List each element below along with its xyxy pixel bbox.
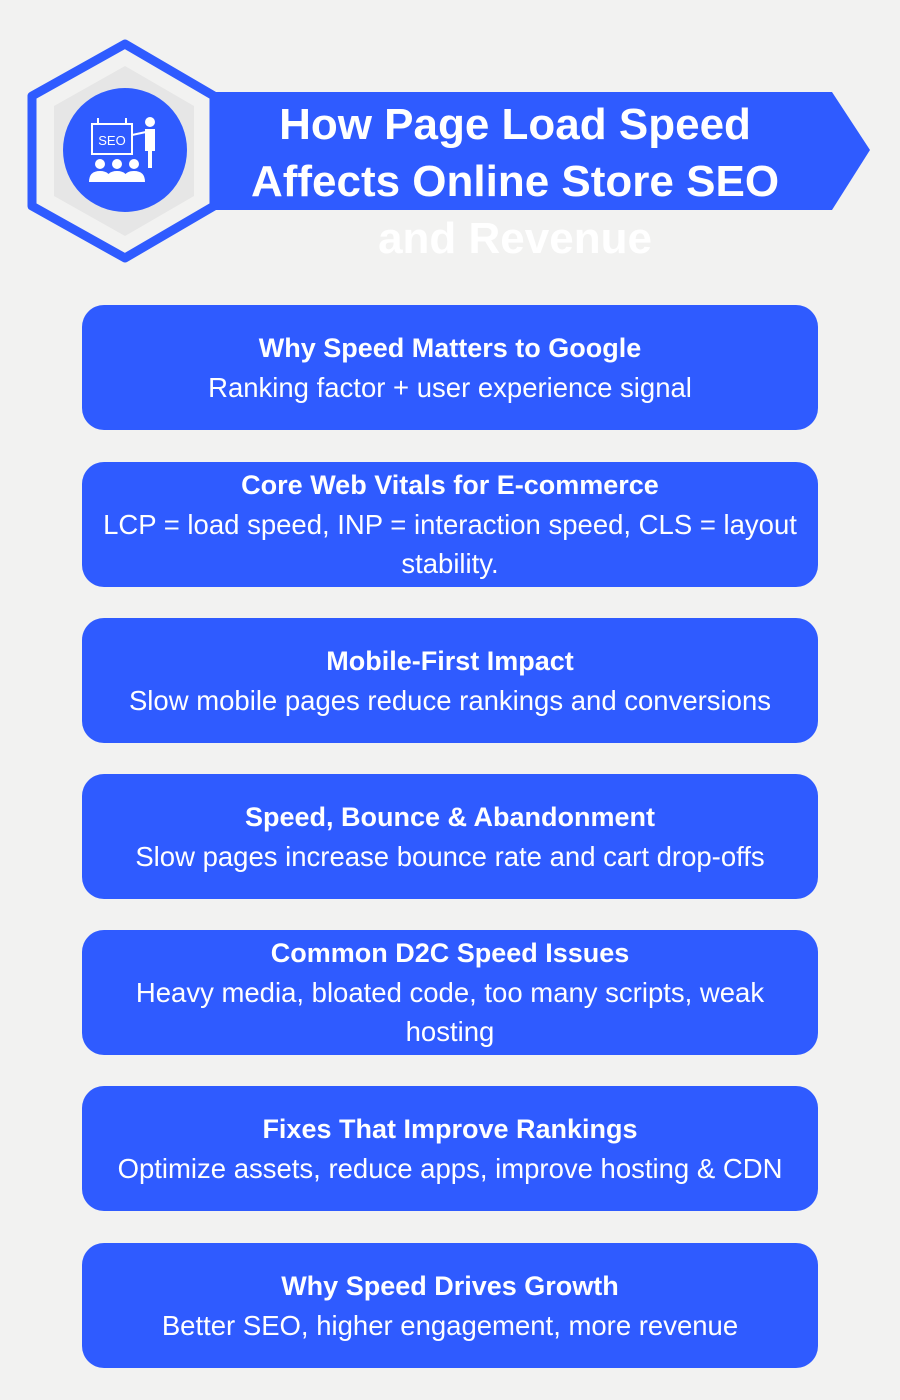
card: D2C issues: Heavy media, bloated code, too many scripts, weak	[136, 977, 764, 1008]
card: D2C issues	[82, 930, 818, 1055]
card: core web vitals: LCP = load speed, INP = interaction speed, CLS = layout	[103, 509, 797, 540]
card: fixes: Fixes That Improve Rankings	[262, 1114, 638, 1144]
title: and Revenue	[378, 214, 652, 263]
card: bounce: Slow pages increase bounce rate and cart drop-offs	[135, 840, 765, 872]
card: mobile-first: Mobile-First Impact	[326, 646, 574, 676]
card: mobile-first	[82, 618, 818, 743]
card: why speed matters	[82, 305, 818, 430]
card: why speed matters: Ranking factor + user experience signal	[208, 372, 692, 402]
card: growth	[82, 1243, 818, 1368]
card: growth: Why Speed Drives Growth	[281, 1270, 619, 1300]
card: core web vitals: stability.	[401, 548, 499, 579]
card: core web vitals: Core Web Vitals for E-commerce	[241, 470, 659, 500]
title: How Page Load Speed	[279, 100, 751, 149]
card: growth: Better SEO, higher engagement, more revenue	[162, 1310, 738, 1340]
banner ribbon	[200, 92, 870, 210]
title	[251, 100, 779, 263]
card: bounce: Speed, Bounce & Abandonment	[245, 802, 655, 832]
icon: hexagon badge: SEO	[98, 133, 126, 148]
header banner	[28, 40, 870, 263]
card: why speed matters: Why Speed Matters to Google	[259, 332, 641, 362]
title: Affects Online Store SEO	[251, 157, 779, 206]
icon: hexagon badge	[32, 44, 214, 258]
card: mobile-first: Slow mobile pages reduce rankings and conversions	[129, 684, 771, 716]
card: D2C issues: hosting	[406, 1016, 494, 1047]
card: D2C issues: Common D2C Speed Issues	[271, 938, 629, 968]
card: core web vitals	[82, 462, 818, 587]
card: fixes: Optimize assets, reduce apps, improve hosting & CDN	[118, 1152, 782, 1184]
card: fixes	[82, 1086, 818, 1211]
card: bounce	[82, 774, 818, 899]
